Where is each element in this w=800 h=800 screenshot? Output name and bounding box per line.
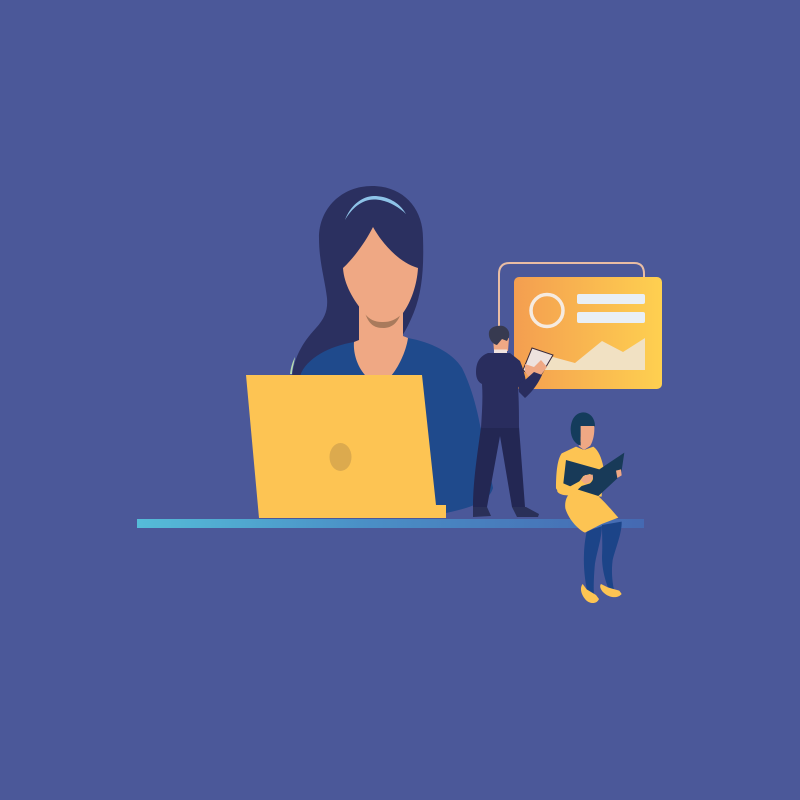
torso and arm xyxy=(556,447,603,497)
neck xyxy=(579,437,591,450)
shoes xyxy=(473,507,539,517)
legs xyxy=(584,522,622,595)
face xyxy=(581,426,594,446)
arm holding book xyxy=(557,474,593,495)
hair xyxy=(571,412,595,446)
legs xyxy=(473,427,525,507)
jacket xyxy=(476,353,526,428)
shirt xyxy=(300,338,493,513)
shoes xyxy=(581,584,622,603)
large woman figure xyxy=(290,186,493,513)
headband xyxy=(345,196,406,220)
man hair xyxy=(489,326,509,345)
hand xyxy=(525,360,547,378)
laptop logo xyxy=(330,443,352,471)
hand left xyxy=(581,475,593,484)
skirt xyxy=(565,490,618,533)
dashboard panel xyxy=(514,277,662,389)
clipboard xyxy=(523,348,553,382)
face xyxy=(343,227,418,322)
neck xyxy=(354,305,408,376)
book xyxy=(563,453,624,496)
text bar 2 xyxy=(577,312,645,323)
shelf xyxy=(137,519,644,528)
man with clipboard xyxy=(473,326,553,517)
text bar 1 xyxy=(577,294,645,304)
shirt collar xyxy=(494,350,507,353)
area chart xyxy=(540,338,645,370)
panel card xyxy=(514,277,662,389)
forearm xyxy=(518,372,542,398)
ring icon xyxy=(531,294,563,326)
collar highlight xyxy=(290,357,295,374)
neck xyxy=(493,338,509,351)
chin shadow xyxy=(365,313,401,328)
hand right xyxy=(616,469,622,478)
laptop body xyxy=(246,375,446,518)
seated woman reading xyxy=(556,412,624,603)
hair xyxy=(292,186,423,376)
laptop xyxy=(246,375,446,518)
connector line xyxy=(499,263,644,326)
